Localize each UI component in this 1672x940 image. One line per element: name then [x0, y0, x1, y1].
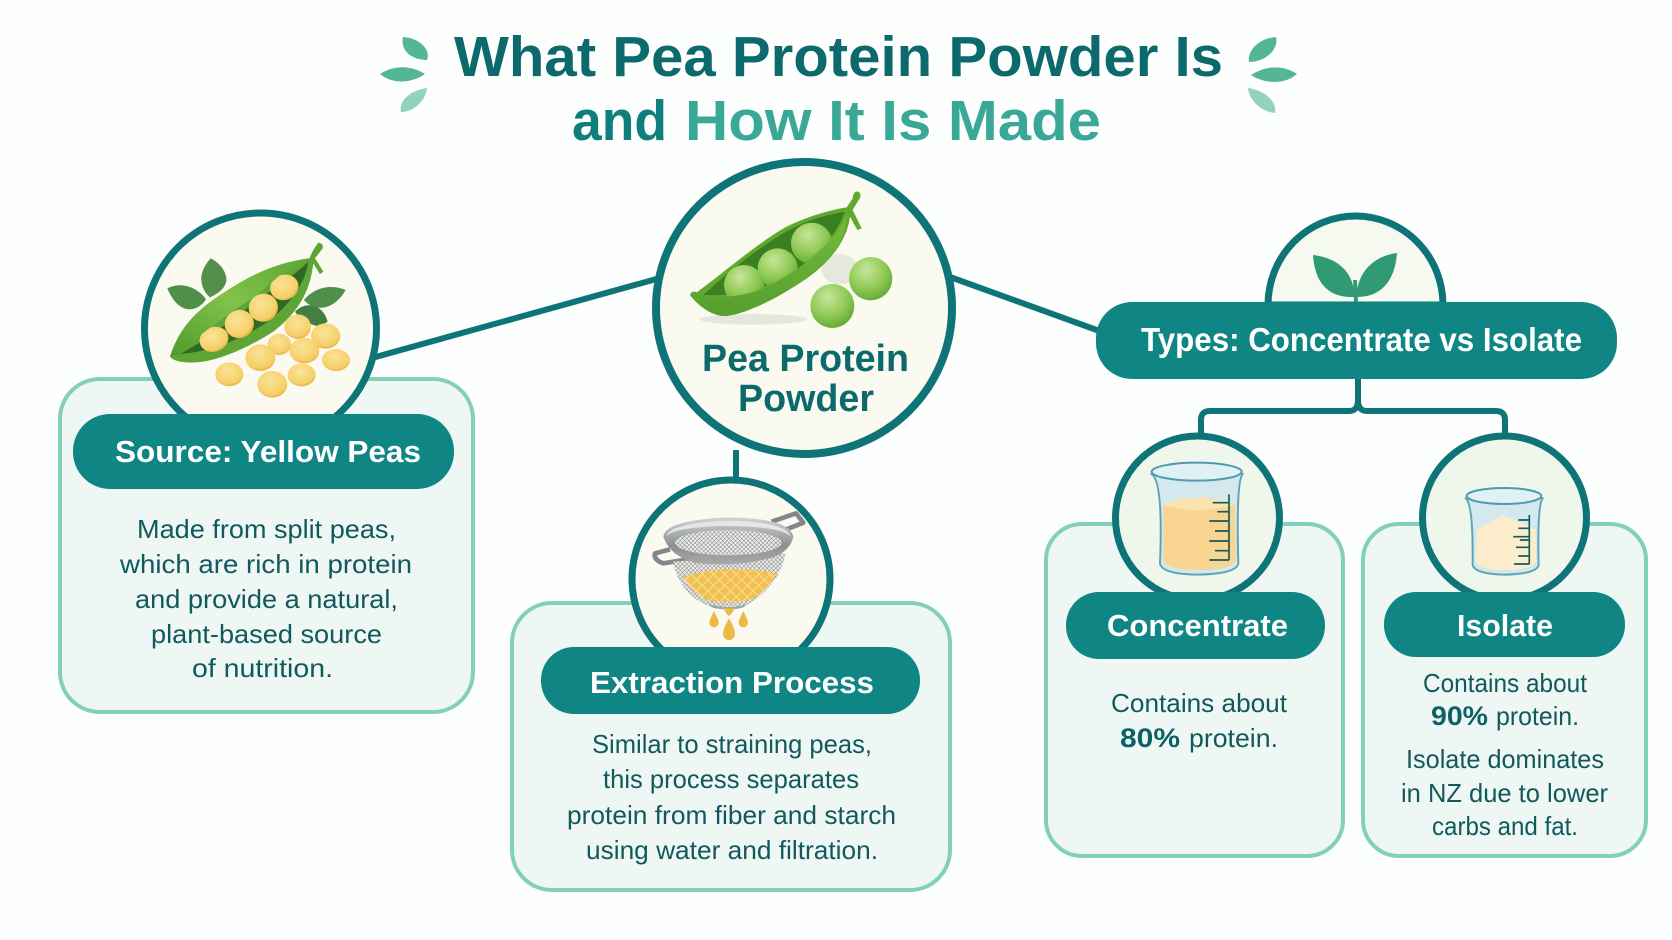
- heading pill: source: [73, 414, 454, 489]
- text: extraction description: Similar to straining peas,: [592, 729, 872, 759]
- icon: beaker with white powder: [1466, 488, 1543, 575]
- text: source description: plant-based source: [151, 619, 382, 649]
- icon: left title leaves: [380, 37, 428, 112]
- text: isolate description: in NZ due to lower: [1401, 778, 1608, 808]
- heading pill: isolate: [1384, 592, 1625, 657]
- panel: extraction process: [512, 480, 950, 890]
- heading pill: extraction: Extraction Process: [590, 665, 874, 700]
- icon: split pea pod with yellow peas: [167, 243, 350, 398]
- text: extraction description: using water and filtration.: [586, 835, 878, 865]
- text: extraction description: this process separates: [603, 764, 859, 794]
- panel: source yellow peas: [60, 213, 473, 712]
- title: What Pea Protein Powder Is: [454, 25, 1223, 89]
- heading pill: isolate: Isolate: [1457, 608, 1553, 643]
- text: source description: which are rich in protein: [119, 549, 412, 579]
- text: isolate description: protein.: [1496, 701, 1579, 731]
- text: concentrate description: Contains about: [1111, 688, 1288, 718]
- text: central label: [702, 338, 909, 420]
- icon: beaker with yellow liquid: [1152, 463, 1243, 575]
- text: isolate description: carbs and fat.: [1432, 811, 1578, 841]
- text: concentrate description: 80%: [1120, 723, 1180, 753]
- text: isolate description: Contains about: [1423, 668, 1588, 698]
- text: source description: Made from split peas,: [137, 514, 396, 544]
- heading pill: source: Source: Yellow Peas: [115, 434, 421, 469]
- text: isolate description: [1401, 668, 1608, 841]
- icon: sprout: [1313, 253, 1397, 302]
- heading pill: concentrate: [1066, 592, 1325, 659]
- central node: pea protein powder: [656, 162, 952, 454]
- heading pill: types: [1096, 302, 1617, 379]
- text: central label: Pea Protein: [702, 338, 909, 380]
- icon: right title leaves: [1248, 37, 1297, 113]
- text: source description: of nutrition.: [192, 653, 333, 683]
- text: source description: and provide a natural,: [135, 584, 398, 614]
- title: [454, 25, 1223, 153]
- heading pill: types: Types: Concentrate vs Isolate: [1141, 321, 1582, 358]
- panel: concentrate: [1046, 436, 1343, 856]
- text: source description: [119, 514, 412, 683]
- text: extraction description: protein from fiber and starch: [567, 800, 896, 830]
- title: How It Is Made: [685, 89, 1101, 153]
- connector: centre to types: [950, 277, 1105, 333]
- text: isolate description: Isolate dominates: [1406, 744, 1604, 774]
- icon: strainer with drops: [655, 513, 803, 640]
- connector: types to concentrate and isolate: [1201, 375, 1505, 436]
- connector: source to centre: [372, 278, 660, 358]
- text: extraction description: [567, 729, 896, 865]
- panel: isolate: [1363, 436, 1646, 856]
- text: concentrate description: protein.: [1189, 723, 1278, 753]
- connector: centre to extraction: [733, 450, 739, 485]
- text: central label: Powder: [738, 378, 874, 420]
- text: isolate description: 90%: [1431, 701, 1488, 731]
- panel: types heading: [1096, 216, 1617, 379]
- heading pill: extraction: [541, 647, 920, 714]
- heading pill: concentrate: Concentrate: [1107, 608, 1288, 643]
- icon: green pea pod with peas: [690, 192, 892, 328]
- title: and: [572, 89, 667, 153]
- text: concentrate description: [1111, 688, 1288, 753]
